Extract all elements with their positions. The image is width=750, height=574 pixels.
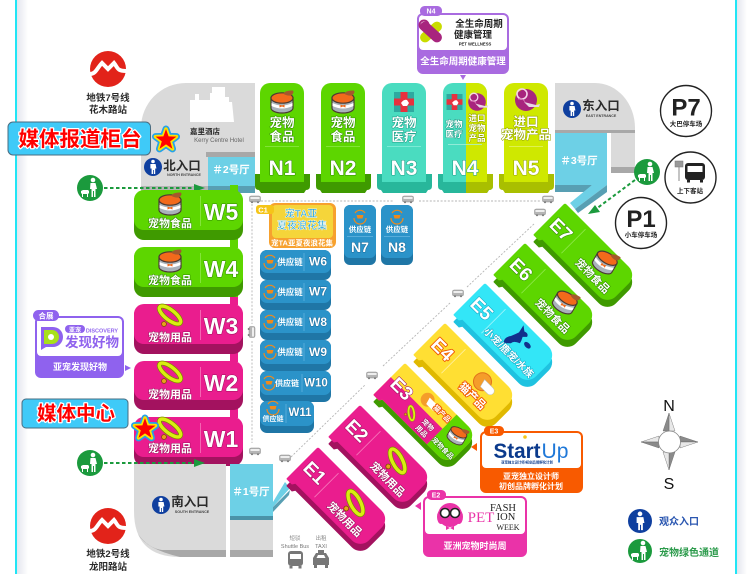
callout: E2 pet fashion week: WEEK: [496, 523, 520, 532]
hall N4: 产品: [468, 133, 486, 143]
icon: cat paw on yarn: [470, 369, 495, 394]
callout: N4 pet wellness: 全生命周期健康管理: [420, 56, 506, 68]
hall W7: 供应链: [277, 287, 303, 297]
callout: E3 start up: 亚宠独立设计师: [503, 471, 559, 481]
hall E3: 猫产品: [432, 403, 453, 424]
hall W1: W1: [204, 426, 238, 452]
hall N4: N4: [452, 157, 479, 180]
compass: S: [664, 476, 674, 493]
parking P1: [616, 198, 666, 248]
hotel label: 嘉里酒店: [190, 126, 220, 136]
callout: E3 start up: 亚宠独立设计师/初创品牌孵化计划: [501, 460, 554, 464]
hall E6: 宠物食品: [532, 295, 573, 336]
shuttle bus and taxi icons: Shuttle Bus: [281, 544, 309, 550]
hall N7: 供应链: [349, 224, 372, 234]
discovery callout: 亚宠: [69, 326, 81, 334]
hall N7: [344, 205, 376, 265]
callout: E2 pet fashion week: E2: [432, 492, 440, 500]
hall W6: 供应链: [277, 257, 303, 267]
hall N1: [255, 83, 310, 193]
hall C1: 宠TA亚夏夜浪花集: [271, 238, 333, 248]
shuttle bus and taxi icons: 短驳: [289, 534, 301, 542]
hall W4: W4: [204, 256, 238, 282]
hall E6: E6: [505, 255, 536, 286]
hall C1: 夏夜浪花集: [277, 219, 327, 232]
icon: media desk star: [156, 129, 176, 149]
hall E2: [328, 403, 434, 516]
shuttle bus and taxi icons: 出租: [315, 534, 327, 542]
pet green channel south arrow: [77, 450, 205, 476]
subway station: line 2 Longyang Road: 地铁2号线: [86, 548, 130, 560]
icon: media center star: [134, 418, 156, 438]
hall N7: N7: [351, 239, 369, 255]
hall E3: E3: [385, 374, 417, 405]
hall N5: N5: [513, 157, 540, 180]
shuttle bus and taxi icons: TAXI: [315, 544, 327, 550]
hall W3: W3: [204, 313, 238, 339]
hall 3 block: ＃3号厅: [560, 155, 598, 167]
callout: E3 start up: E3: [490, 428, 498, 436]
legend: visitor entrance: 观众入口: [659, 516, 699, 528]
pet green channel east arrow: [588, 159, 660, 214]
hall E5: 小宠/鹿宠/水族: [481, 325, 536, 380]
hall W4: [134, 247, 243, 297]
north entrance label: NORTH ENTRANCE: [167, 173, 201, 177]
subway station: line 7 Huamu Road: 地铁7号线: [86, 92, 130, 104]
east entrance label: [563, 98, 620, 118]
hall E2: 宠物用品: [367, 459, 408, 500]
hall E7: 宠物食品: [572, 255, 613, 296]
media center label: 媒体中心: [37, 403, 115, 425]
media center label: [22, 399, 128, 428]
callout: E2 pet fashion week: 亚洲宠物时尚周: [443, 540, 507, 551]
hall N4: 宠物: [468, 123, 486, 133]
callout: E3 start up: 初创品牌孵化计划: [499, 481, 563, 491]
hall N2: 宠物: [330, 115, 356, 130]
hall W2: 宠物用品: [148, 387, 192, 401]
hall E1: [286, 445, 392, 558]
callout: E3 start up: Start: [494, 440, 540, 463]
south entrance label: 南入口: [171, 495, 209, 509]
discovery callout: 亚宠发现好物: [53, 361, 107, 372]
hall W7: W7: [309, 284, 327, 298]
hall N5: 宠物产品: [501, 127, 551, 142]
east entrance area: [555, 83, 635, 173]
compass: N: [663, 398, 675, 415]
subway station: line 2 Longyang Road: 龙阳路站: [89, 561, 127, 573]
hall N5: [499, 83, 554, 193]
parking P7: [660, 86, 712, 136]
callout: N4 pet wellness: 健康管理: [454, 29, 492, 41]
callout: N4 pet wellness: 全生命周期: [455, 18, 503, 30]
hall C1: 宠TA亚: [285, 207, 317, 220]
hall E4: [413, 323, 517, 434]
bus stop: [665, 152, 716, 203]
discovery callout: 发现好物: [65, 334, 119, 350]
hall E7: [533, 202, 638, 314]
hall W5: 宠物食品: [148, 216, 192, 230]
hall N8: N8: [388, 239, 406, 255]
hall W9: 供应链: [277, 347, 303, 357]
hall W11: 供应链: [262, 414, 284, 423]
hall N4: 医疗: [445, 129, 463, 139]
callout: E2 pet fashion week: FASH: [490, 503, 516, 514]
hall N2: [316, 83, 371, 193]
compass: [641, 398, 698, 493]
legend: visitor entrance: [628, 509, 699, 533]
left frame edge: [15, 0, 28, 574]
hall W5: W5: [204, 199, 238, 225]
icon: pink dog with glasses: [437, 503, 463, 530]
hall E4: 猫产品: [456, 379, 489, 412]
icon: Kerry Centre hotel building: [190, 87, 234, 122]
discovery callout: DISCOVERY: [86, 328, 118, 334]
media desk label: [8, 122, 150, 155]
hall W3: [134, 303, 243, 354]
hall W1: [134, 416, 243, 466]
hall N2: 食品: [330, 129, 356, 144]
hall E1: 宠物用品: [324, 499, 365, 540]
hall W9: [260, 340, 331, 371]
right frame edge: [735, 0, 747, 574]
callout: N4 pet wellness: PET WELLNESS: [459, 42, 491, 46]
hall C1: [256, 203, 336, 248]
hall W4: 宠物食品: [148, 273, 192, 287]
east entrance label: EAST ENTRANCE: [586, 114, 617, 118]
hall W5: [134, 190, 243, 240]
callout: N4 pet wellness: N4: [427, 8, 436, 16]
hall E1: E1: [298, 458, 330, 489]
shuttle route dotted lines and buses: [248, 196, 553, 462]
hall N4: 进口: [468, 113, 486, 123]
hall E3: [373, 363, 477, 474]
north entrance area: [141, 83, 255, 191]
hall 2 block: [206, 152, 255, 193]
south entrance label: SOUTH ENTRANCE: [175, 510, 210, 514]
hall N1: 食品: [269, 129, 295, 144]
hall N4: [438, 83, 493, 193]
hall W1: 宠物用品: [148, 441, 192, 455]
icon: rabbit and fish: [504, 325, 528, 343]
parking P7: 大巴停车场: [670, 119, 703, 128]
hall N3: [377, 83, 432, 193]
hall N3: 宠物: [391, 115, 417, 130]
hall C1: C1: [258, 206, 268, 214]
south entrance label: [152, 495, 210, 514]
callout: E2 pet fashion week: PET: [468, 510, 494, 526]
hall W8: W8: [309, 315, 327, 329]
hall W8: [260, 310, 331, 340]
hall N4: 宠物: [445, 119, 463, 129]
parking P1: P1: [626, 206, 656, 233]
east entrance label: 东入口: [582, 98, 620, 113]
hall W10: [260, 371, 331, 402]
hall W8: 供应链: [277, 317, 303, 327]
north entrance label: 北入口: [163, 159, 201, 173]
callout: N4 pet wellness: [417, 6, 509, 80]
hall W11: [260, 401, 314, 433]
shuttle bus and taxi icons: [281, 534, 329, 568]
callout: E2 pet fashion week: [415, 490, 527, 557]
hall W2: [134, 360, 243, 410]
parking P1: 小车停车场: [625, 230, 658, 239]
hall E3: 宠物食品: [430, 435, 456, 461]
connectors between west halls: [230, 185, 238, 418]
hall E7: E7: [545, 215, 576, 246]
hall W11: W11: [288, 407, 312, 419]
hall W7: [260, 280, 331, 310]
hall 1 block: [230, 464, 290, 520]
callout: E3 start up: [471, 426, 583, 493]
pet green channel north arrow: [77, 175, 205, 201]
parking P7: P7: [671, 94, 701, 122]
hall 3 block: [555, 133, 607, 213]
bus stop: 上下客站: [677, 186, 704, 195]
hall E4: E4: [426, 335, 458, 366]
callout: E2 pet fashion week: ION: [497, 512, 516, 523]
hall 2 block: ＃2号厅: [212, 164, 250, 176]
hall E5: [453, 283, 557, 394]
hotel label: Kerry Centre Hotel: [194, 138, 244, 144]
legend: pet green channel: 宠物绿色通道: [659, 546, 719, 559]
hall W6: [260, 250, 331, 280]
discovery callout: 合展: [38, 310, 54, 320]
north entrance label: [144, 158, 201, 177]
hall N1: N1: [269, 157, 296, 180]
hall N8: 供应链: [386, 224, 409, 234]
hall E2: E2: [340, 416, 372, 447]
hall W10: W10: [304, 378, 328, 390]
legend: pet green channel: [628, 539, 719, 563]
hall W10: 供应链: [275, 378, 299, 388]
hall W3: 宠物用品: [148, 330, 192, 344]
hall W6: W6: [309, 254, 327, 268]
callout: E3 start up: Up: [542, 440, 568, 463]
subway station: line 7 Huamu Road: [86, 51, 130, 116]
hall N2: N2: [330, 157, 356, 180]
hall N5: 进口: [513, 115, 539, 129]
media desk label: 媒体报道柜台: [18, 127, 142, 151]
hotel label: [190, 126, 244, 144]
icon: wellness capsules: [418, 20, 444, 44]
hall E3: 宠物: [420, 417, 436, 433]
discovery callout: [33, 310, 131, 378]
subway station: line 2 Longyang Road: [86, 508, 130, 573]
hall E5: E5: [465, 294, 497, 325]
subway station: line 7 Huamu Road: 花木路站: [89, 104, 127, 116]
hall E3: 用品: [413, 424, 429, 439]
hall E6: [493, 242, 598, 354]
hall N3: 医疗: [391, 129, 417, 144]
icon: discovery logo: [41, 327, 63, 350]
hall N3: N3: [391, 157, 417, 180]
hall W2: W2: [204, 370, 238, 396]
hall N8: [381, 205, 413, 265]
hall 1 block: ＃1号厅: [232, 486, 270, 498]
south entrance area: [134, 464, 273, 557]
hall W9: W9: [309, 345, 327, 359]
hall N1: 宠物: [269, 115, 295, 130]
